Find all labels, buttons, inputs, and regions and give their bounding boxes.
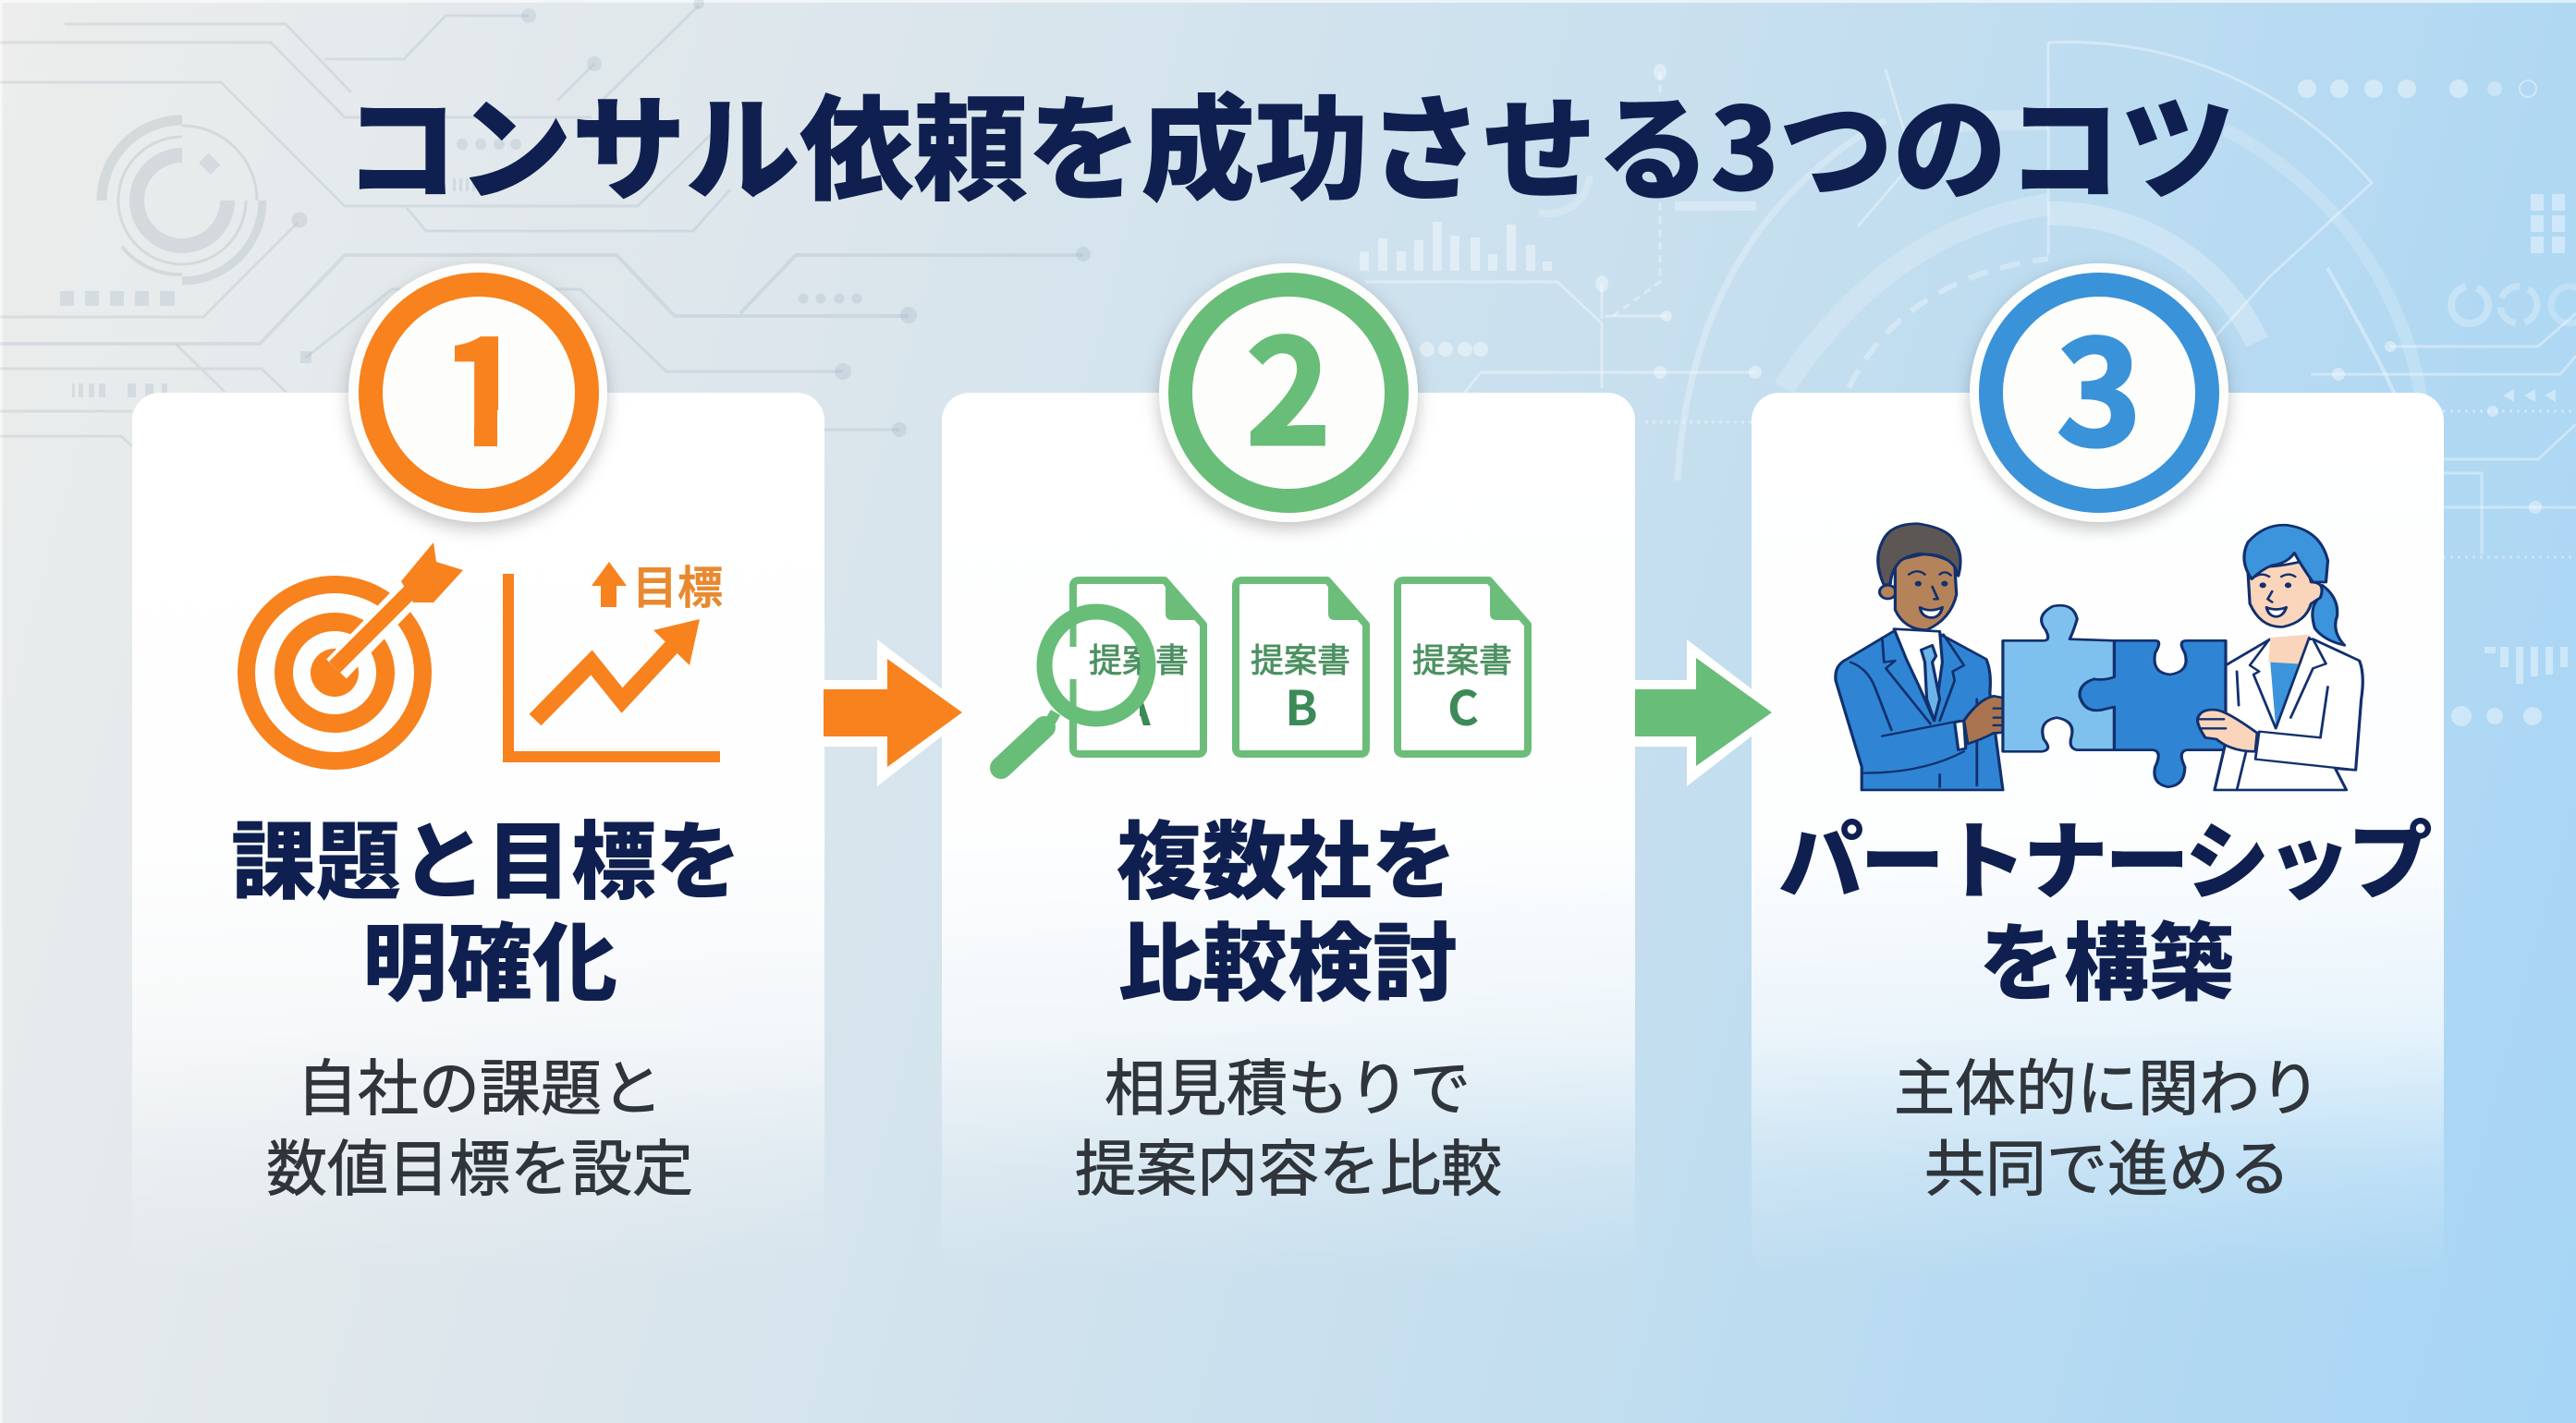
icon: proposal document B — [1236, 580, 1366, 754]
description 1: 自社の課題と — [297, 1054, 663, 1123]
step badge 3 — [1970, 263, 2228, 522]
icon: proposal document A: A — [1118, 670, 1151, 739]
man in blue suit — [1836, 524, 2024, 790]
step badge 2 — [1159, 263, 1418, 522]
arrow: step 1 to step 2 — [824, 639, 972, 786]
step badge 3: 3 — [2057, 278, 2142, 488]
background circuit pattern: left — [0, 0, 1091, 446]
heading 1: 課題と目標を — [231, 816, 741, 910]
description 1: 数値目標を設定 — [266, 1135, 693, 1203]
panel: step 2 — [942, 263, 1635, 1275]
title: コンサル依頼を成功させる3つのコツ — [344, 57, 2235, 224]
description 3: 主体的に関わり — [1894, 1054, 2321, 1123]
panel: step 3 — [1752, 263, 2444, 1275]
description 2: 相見積もりで — [1105, 1054, 1471, 1123]
icon: proposal document C — [1398, 580, 1528, 754]
icon: proposal document C: 提案書 — [1412, 641, 1512, 679]
heading 2: 複数社を — [1117, 816, 1457, 910]
icon: two people joining puzzle pieces — [1836, 524, 2362, 790]
heading 2: 比較検討 — [1117, 918, 1458, 1012]
icon: rising chart labelled 目標: 目標 — [632, 564, 723, 614]
panel: step 1 — [132, 263, 824, 1275]
icon: rising chart labelled 目標 — [508, 562, 723, 757]
puzzle piece: light blue — [2003, 605, 2114, 751]
icon: proposal document A — [1073, 580, 1203, 754]
woman in white coat — [2198, 525, 2362, 790]
puzzle piece: dark blue — [2080, 640, 2226, 787]
icon: proposal document B: 提案書 — [1251, 641, 1350, 679]
icon: proposal document C: C — [1447, 670, 1479, 739]
step badge 1 — [348, 263, 607, 522]
heading 3: を構築 — [1979, 918, 2234, 1012]
icon: target with arrow — [246, 542, 463, 761]
card background 3 — [1752, 393, 2444, 1275]
card background 1 — [132, 393, 824, 1275]
icon: magnifying glass: 提案書 — [1089, 641, 1189, 679]
heading 1: 明確化 — [362, 918, 617, 1012]
card background 2 — [942, 393, 1635, 1275]
description 3: 共同で進める — [1924, 1135, 2290, 1203]
icon: magnifying glass — [1001, 610, 1189, 768]
icon: proposal document B: B — [1285, 670, 1318, 739]
background tech pattern: right — [1360, 42, 2576, 726]
description 2: 提案内容を比較 — [1075, 1135, 1502, 1203]
step badge 2: 2 — [1246, 277, 1331, 487]
heading 3: パートナーシップ — [1778, 816, 2433, 910]
arrow: step 2 to step 3 — [1635, 639, 1782, 786]
step badge 1: 1 — [441, 278, 526, 488]
